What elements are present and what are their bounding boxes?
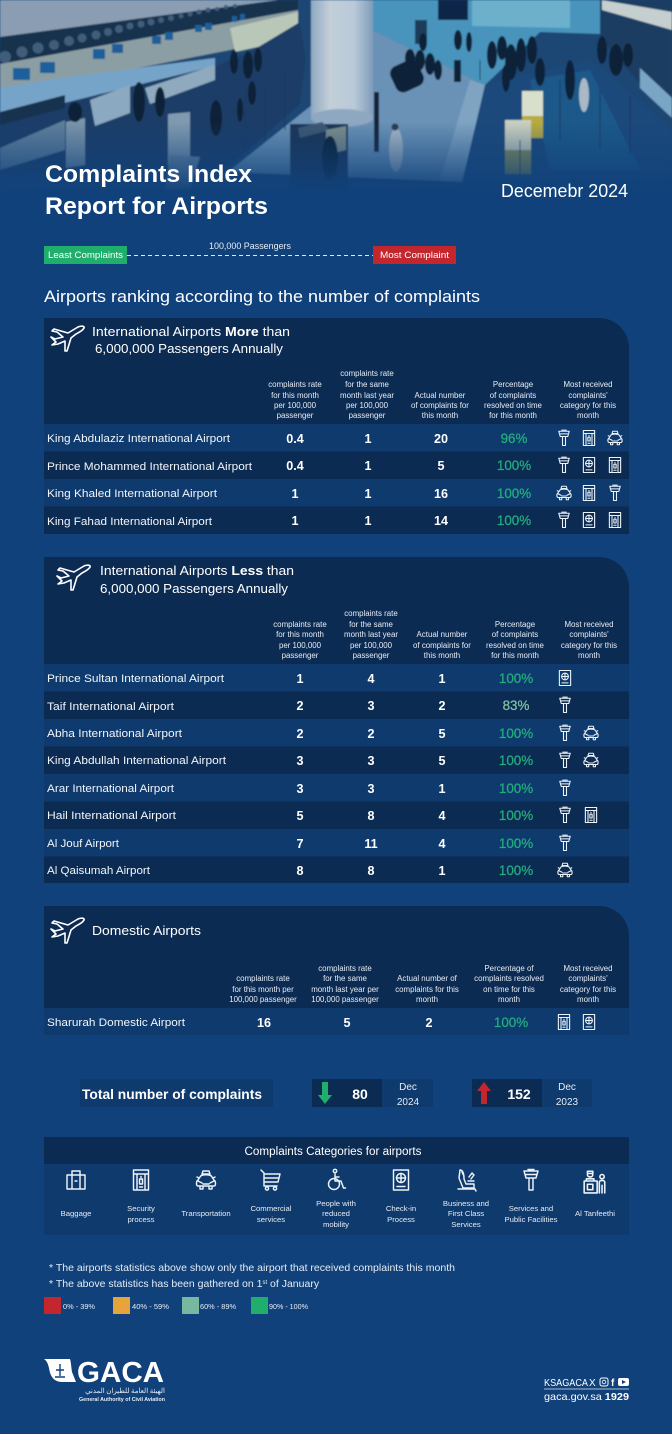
colour legend: 40% - 59% bbox=[132, 1304, 169, 1311]
row: Prince Sultan: 4 bbox=[367, 672, 375, 686]
row: Hail: 100% bbox=[499, 808, 533, 823]
row: King Khaled: King Khaled International Airport bbox=[47, 488, 217, 500]
row: Arar: 1 bbox=[438, 782, 446, 796]
row: Al Jouf bbox=[44, 829, 629, 856]
total: December 2024: 80 bbox=[352, 1086, 368, 1102]
column headers: complaints' bbox=[568, 974, 608, 983]
category: security process: Security bbox=[127, 1204, 155, 1213]
column headers: for the same bbox=[323, 974, 368, 983]
icon: airplane bbox=[51, 326, 84, 351]
column headers: Most received bbox=[563, 964, 613, 973]
row: Taif: 2 bbox=[438, 699, 446, 713]
panel title: International Airports More than bbox=[92, 324, 290, 339]
row: Al Qaisumah: 1 bbox=[438, 864, 446, 878]
column headers: category for this bbox=[560, 985, 616, 994]
row: Al Jouf: 11 bbox=[364, 837, 378, 851]
row: Hail: 5 bbox=[296, 809, 304, 823]
row: Hail: Hail International Airport bbox=[47, 810, 176, 822]
row: King Abdullah: King Abdullah International Airport bbox=[47, 755, 226, 767]
column headers: of complaints for bbox=[411, 401, 469, 410]
category: business and first class: Services bbox=[451, 1220, 481, 1229]
total: December 2023: 152 bbox=[507, 1086, 531, 1102]
column headers: month bbox=[498, 995, 520, 1004]
row: King Fahad: 14 bbox=[434, 514, 448, 528]
row: Prince Sultan: 1 bbox=[438, 672, 446, 686]
category: business and first class: First Class bbox=[448, 1209, 484, 1218]
category: check-in process: Process bbox=[387, 1215, 415, 1224]
column headers: complaints rate bbox=[236, 974, 290, 983]
row: Al Jouf: 4 bbox=[438, 837, 446, 851]
column headers: passenger bbox=[353, 651, 390, 660]
row: King Khaled: 1 bbox=[364, 487, 372, 501]
row: King Abdulaziz bbox=[44, 424, 629, 452]
column headers: passenger bbox=[282, 651, 319, 660]
row: Abha bbox=[44, 719, 629, 746]
panel title: International Airports Less than bbox=[100, 563, 294, 578]
row: King Abdulaziz: 96% bbox=[501, 431, 527, 446]
row: King Abdullah bbox=[47, 752, 598, 768]
row: King Fahad: 1 bbox=[364, 514, 372, 528]
row: King Khaled bbox=[44, 479, 629, 506]
row: Al Qaisumah: 100% bbox=[499, 863, 533, 878]
row: King Abdullah: 5 bbox=[438, 754, 446, 768]
row: King Abdullah: 100% bbox=[499, 753, 533, 768]
row: Abha: 100% bbox=[499, 726, 533, 741]
social handles and website bbox=[544, 1378, 629, 1403]
column headers: on time for this bbox=[483, 985, 535, 994]
panel title: Domestic Airports bbox=[92, 923, 201, 938]
category: baggage: Baggage bbox=[61, 1209, 91, 1218]
row: Taif: 3 bbox=[367, 699, 375, 713]
row: Arar bbox=[44, 774, 629, 802]
total number of complaints label: Total number of complaints bbox=[82, 1086, 262, 1102]
row: Prince Sultan bbox=[44, 664, 629, 692]
category: al tanfeethi bbox=[575, 1171, 615, 1218]
total: December 2023: Dec bbox=[558, 1082, 576, 1093]
column headers: complaints for this bbox=[395, 985, 459, 994]
panel title: 6,000,000 Passengers Annually bbox=[100, 581, 288, 596]
date: Decemebr 2024 bbox=[501, 180, 628, 201]
column headers: of complaints bbox=[492, 630, 538, 639]
category: al tanfeethi: Al Tanfeethi bbox=[575, 1209, 615, 1218]
column headers: passenger bbox=[277, 411, 314, 420]
column headers: per 100,000 bbox=[279, 641, 322, 650]
row: Taif bbox=[47, 697, 570, 713]
row: Prince Mohammed: 5 bbox=[437, 459, 445, 473]
row: Abha: 2 bbox=[296, 727, 304, 741]
category: business and first class bbox=[443, 1170, 489, 1229]
social handles and website: gaca.gov.sa 1929 bbox=[544, 1391, 629, 1403]
column headers: resolved on time bbox=[486, 641, 545, 650]
row: King Abdulaziz: 0.4 bbox=[286, 432, 304, 446]
total: December 2023: 2023 bbox=[556, 1097, 579, 1108]
total: December 2024: Dec bbox=[399, 1082, 417, 1093]
column headers: complaints rate bbox=[273, 620, 327, 629]
row: Al Qaisumah: 8 bbox=[296, 864, 304, 878]
column headers: complaints' bbox=[568, 391, 608, 400]
GACA logo: GACA bbox=[77, 1357, 164, 1389]
column headers: complaints rate bbox=[344, 609, 398, 618]
column headers: month last year bbox=[340, 391, 394, 400]
row: Sharurah: 100% bbox=[494, 1015, 528, 1030]
row: Prince Mohammed: Prince Mohammed International Airport bbox=[47, 461, 252, 473]
row: Sharurah: 16 bbox=[257, 1016, 271, 1030]
scale legend: least to most complaints bbox=[44, 241, 456, 264]
column headers: category for this bbox=[561, 641, 617, 650]
total: December 2024 bbox=[312, 1079, 433, 1108]
row: Arar: 100% bbox=[499, 781, 533, 796]
category: services and public facilities: Services and bbox=[509, 1204, 553, 1213]
hero photo: airport check-in hall bbox=[0, 0, 672, 202]
row: King Khaled: 16 bbox=[434, 487, 448, 501]
column headers bbox=[268, 369, 616, 420]
row: Taif: 2 bbox=[296, 699, 304, 713]
row: Hail bbox=[47, 807, 597, 823]
icon: green down arrow bbox=[318, 1082, 332, 1104]
column headers: Actual number of bbox=[397, 974, 458, 983]
icon: airplane bbox=[51, 918, 84, 943]
column headers: 100,000 passenger bbox=[311, 995, 379, 1004]
column headers: per 100,000 bbox=[274, 401, 317, 410]
title bbox=[45, 161, 268, 220]
row: Al Jouf: 7 bbox=[296, 837, 304, 851]
row: Prince Sultan: 100% bbox=[499, 671, 533, 686]
column headers: complaints rate bbox=[318, 964, 372, 973]
row: King Abdulaziz: 20 bbox=[434, 432, 448, 446]
row: King Abdullah: 3 bbox=[296, 754, 304, 768]
column headers: of complaints for bbox=[413, 641, 471, 650]
section heading: Airports ranking according to the number of complaints bbox=[44, 288, 480, 306]
row: King Abdulaziz: King Abdulaziz International Airport bbox=[47, 433, 230, 445]
row: Prince Sultan: 1 bbox=[296, 672, 304, 686]
row: Sharurah: Sharurah Domestic Airport bbox=[47, 1017, 185, 1029]
row: Sharurah: 2 bbox=[425, 1016, 433, 1030]
row: Abha: 2 bbox=[367, 727, 375, 741]
category: services and public facilities bbox=[505, 1170, 558, 1224]
colour legend: 60% - 89% bbox=[200, 1304, 236, 1311]
row: Taif: 83% bbox=[503, 698, 529, 713]
social handles and website: KSAGACA bbox=[544, 1378, 588, 1389]
column headers: Actual number bbox=[415, 391, 466, 400]
category: check-in process: Check-in bbox=[386, 1204, 416, 1213]
row: Arar: 3 bbox=[296, 782, 304, 796]
column headers: for this month per bbox=[232, 985, 294, 994]
category: baggage bbox=[61, 1171, 91, 1218]
colour legend bbox=[44, 1297, 308, 1314]
row: Prince Sultan: Prince Sultan International Airport bbox=[47, 673, 224, 685]
column headers: passenger bbox=[349, 411, 386, 420]
category: people with reduced mobility: reduced bbox=[322, 1209, 350, 1218]
colour legend: 0% - 39% bbox=[63, 1304, 95, 1311]
column headers: Most received bbox=[563, 380, 613, 389]
panel title bbox=[92, 324, 290, 356]
row: King Khaled: 100% bbox=[497, 486, 531, 501]
row: King Fahad: 1 bbox=[291, 514, 299, 528]
icon: airplane bbox=[57, 565, 90, 590]
category: transportation bbox=[181, 1171, 231, 1218]
row: Hail: 4 bbox=[438, 809, 446, 823]
footnotes: of January bbox=[267, 1278, 320, 1290]
row: Al Jouf: Al Jouf Airport bbox=[47, 838, 119, 850]
title: Report for Airports bbox=[45, 193, 268, 220]
row: Al Qaisumah: Al Qaisumah Airport bbox=[47, 865, 150, 877]
row: Al Jouf: 100% bbox=[499, 836, 533, 851]
panel title bbox=[100, 563, 294, 596]
row: Al Qaisumah bbox=[47, 863, 572, 878]
panel: international airports more than 6,000,000 passengers bbox=[44, 318, 629, 534]
row: King Fahad: King Fahad International Airport bbox=[47, 516, 212, 528]
column headers: for this month bbox=[276, 630, 324, 639]
category: commercial services: Commercial bbox=[250, 1204, 292, 1213]
category: transportation: Transportation bbox=[181, 1209, 231, 1218]
column headers: month last year per bbox=[311, 985, 379, 994]
column headers: Actual number bbox=[417, 630, 468, 639]
category: security process bbox=[127, 1170, 155, 1224]
panel title: 6,000,000 Passengers Annually bbox=[95, 341, 283, 356]
footnotes bbox=[49, 1262, 455, 1290]
column headers: month bbox=[577, 995, 599, 1004]
column headers: for this month bbox=[271, 391, 319, 400]
row: Taif: Taif International Airport bbox=[47, 701, 174, 713]
footnotes: * The airports statistics above show only the airport that received complaints this month bbox=[49, 1262, 455, 1274]
row: Prince Mohammed bbox=[47, 457, 621, 473]
column headers: for this month bbox=[489, 411, 537, 420]
colour legend: 90% - 100% bbox=[269, 1304, 308, 1311]
column headers: month bbox=[578, 651, 600, 660]
row: King Fahad bbox=[47, 512, 621, 528]
row: King Fahad: 100% bbox=[497, 513, 531, 528]
row: King Abdullah: 3 bbox=[367, 754, 375, 768]
column headers: for the same bbox=[349, 620, 394, 629]
scale legend: least to most complaints: Most Complaint bbox=[380, 250, 449, 261]
scale legend: least to most complaints: Least Complaints bbox=[48, 250, 123, 261]
row: Abha: Abha International Airport bbox=[47, 728, 182, 740]
category: business and first class: Business and bbox=[443, 1199, 489, 1208]
scale legend: least to most complaints: 100,000 Passengers bbox=[209, 241, 291, 252]
category: security process: process bbox=[128, 1215, 155, 1224]
total: December 2023 bbox=[472, 1079, 592, 1108]
row: Prince Mohammed: 1 bbox=[364, 459, 372, 473]
category: people with reduced mobility bbox=[316, 1169, 356, 1229]
row: Hail: 8 bbox=[367, 809, 375, 823]
category: commercial services: services bbox=[257, 1215, 285, 1224]
column headers: month last year bbox=[344, 630, 398, 639]
GACA logo: الهيئة العامة للطيران المدني bbox=[85, 1386, 165, 1396]
column headers: complaints resolved bbox=[474, 974, 544, 983]
row: Abha: 5 bbox=[438, 727, 446, 741]
column headers: 100,000 passenger bbox=[229, 995, 297, 1004]
title: Complaints Index bbox=[45, 161, 253, 188]
column headers: for this month bbox=[491, 651, 539, 660]
footnotes: * The above statistics has been gathered on 1 bbox=[49, 1278, 262, 1290]
social handles and website: X bbox=[589, 1378, 596, 1389]
category: people with reduced mobility: People with bbox=[316, 1199, 356, 1208]
category: check-in process bbox=[386, 1170, 416, 1224]
column headers: for the same bbox=[345, 380, 390, 389]
column headers: Percentage bbox=[495, 620, 536, 629]
social handles and website: f bbox=[611, 1378, 615, 1389]
column headers: Percentage of bbox=[484, 964, 534, 973]
footnotes: st bbox=[262, 1280, 267, 1286]
column headers: Percentage bbox=[493, 380, 534, 389]
column headers: this month bbox=[424, 651, 460, 660]
column headers: month bbox=[416, 995, 438, 1004]
row: King Khaled: 1 bbox=[291, 487, 299, 501]
column headers: complaints rate bbox=[268, 380, 322, 389]
panel: domestic airports bbox=[44, 906, 629, 1035]
column headers: of complaints bbox=[490, 391, 536, 400]
column headers: complaints rate bbox=[340, 369, 394, 378]
column headers: month bbox=[577, 411, 599, 420]
GACA logo bbox=[44, 1357, 165, 1403]
column headers: complaints' bbox=[569, 630, 609, 639]
panel: international airports less than 6,000,000 passengers bbox=[44, 557, 629, 883]
column headers: per 100,000 bbox=[350, 641, 393, 650]
total number of complaints label bbox=[80, 1079, 273, 1107]
column headers: Most received bbox=[564, 620, 614, 629]
row: Prince Mohammed: 0.4 bbox=[286, 459, 304, 473]
row: Arar: Arar International Airport bbox=[47, 783, 174, 795]
category: commercial services bbox=[250, 1170, 292, 1224]
icon: red up arrow bbox=[477, 1082, 491, 1104]
column headers bbox=[229, 964, 616, 1004]
row: King Abdulaziz: 1 bbox=[364, 432, 372, 446]
row: Arar: 3 bbox=[367, 782, 375, 796]
panel: complaints categories bbox=[44, 1137, 629, 1235]
row: Sharurah bbox=[44, 1008, 629, 1035]
category: people with reduced mobility: mobility bbox=[323, 1220, 349, 1229]
column headers: resolved on time bbox=[484, 401, 543, 410]
category: services and public facilities: Public Facilities bbox=[505, 1215, 558, 1224]
column headers bbox=[273, 609, 617, 660]
column headers: category for this bbox=[560, 401, 616, 410]
column headers: this month bbox=[422, 411, 458, 420]
row: Al Qaisumah: 8 bbox=[367, 864, 375, 878]
total: December 2024: 2024 bbox=[397, 1097, 420, 1108]
column headers: per 100,000 bbox=[346, 401, 389, 410]
categories heading: Complaints Categories for airports bbox=[244, 1146, 422, 1158]
row: Sharurah: 5 bbox=[343, 1016, 351, 1030]
row: Prince Mohammed: 100% bbox=[497, 458, 531, 473]
GACA logo: General Authority of Civil Aviation bbox=[79, 1397, 165, 1403]
